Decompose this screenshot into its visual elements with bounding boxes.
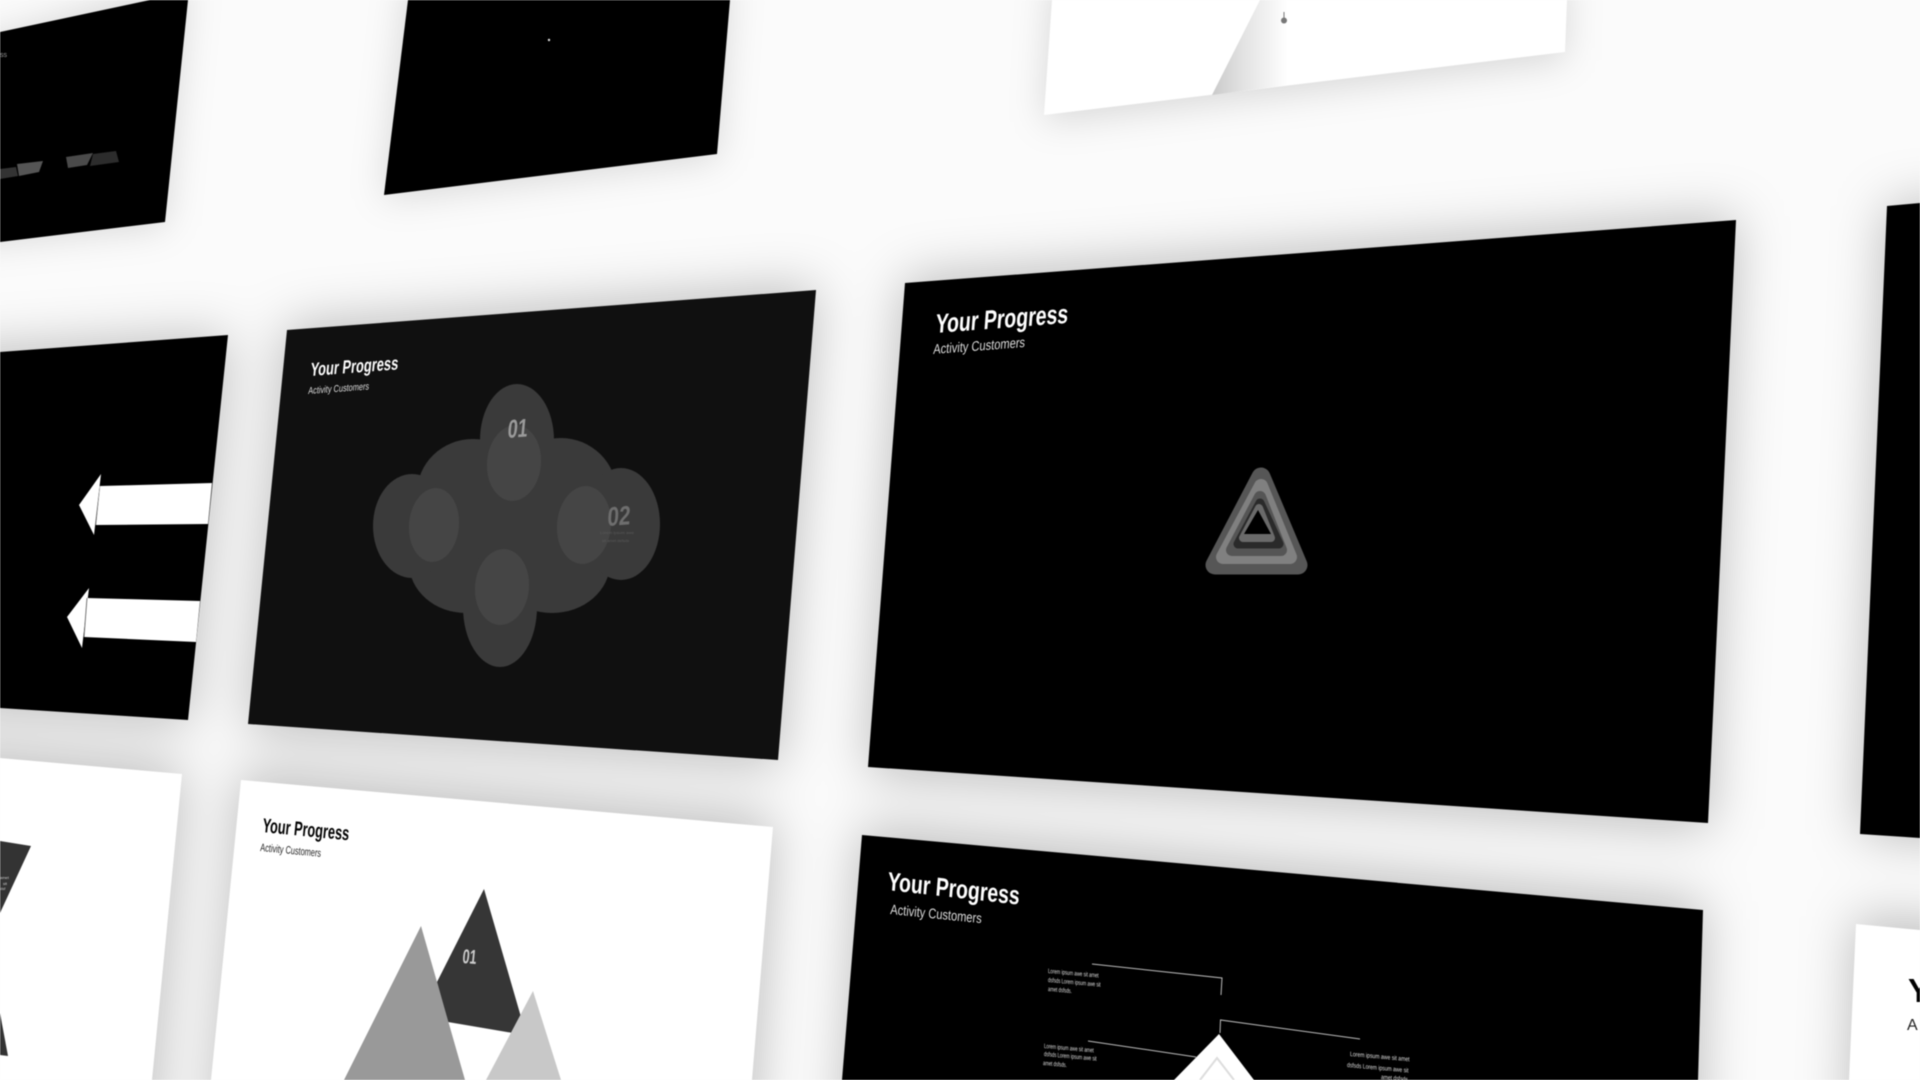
panel: top-center dark slide [384,0,730,195]
slide background [868,220,1736,823]
callout text left bottom [1043,1043,1097,1069]
slide title: Your Progress [935,299,1069,339]
clipped subtitle: A [1907,1017,1918,1034]
pin icon [1281,12,1287,24]
panel: top-right white slide [1044,0,1567,115]
slide title: Your Progress [261,815,350,845]
slide subtitle: Activity Customers [260,842,322,860]
caption 02 [600,530,635,543]
callout text left top: dsfsds Lorem ipsum awe sit [1048,977,1101,989]
top row shadows [0,0,1567,246]
slide subtitle: Activity Customers [308,381,370,397]
concentric triangle [1215,477,1298,565]
chart segments [0,151,119,179]
callout text left top: Lorem ipsum awe sit amet [1048,968,1099,980]
white dot [548,39,550,41]
slide subtitle: Activity Customers [933,334,1026,357]
tiny caption: sit [3,881,8,886]
number 02: 02 [607,500,631,532]
callout text left top: amet dsfsds. [1048,986,1072,995]
panel: dark slide with cloud diagram [248,290,816,760]
white pyramid [1174,1034,1254,1080]
dark shape lower [0,1013,8,1056]
callout text right: Lorem ipsum awe sit amet [1350,1051,1410,1063]
slide subtitle: Activity Customers [890,901,982,926]
callout text left bottom: dsfsds Lorem ipsum awe sit [1044,1051,1097,1063]
arrow 1 [79,474,212,535]
slide background [842,835,1703,1080]
callout text left top [1048,968,1101,995]
slide background [0,758,182,1080]
slide title: Your Progress [310,353,399,381]
grey peak [344,926,465,1080]
cloud shape [373,384,660,667]
dark shape upper [0,841,31,913]
callout text right [1347,1051,1410,1080]
panel: top-left dark slide [0,0,188,242]
slide background [1044,0,1567,115]
arrow 2 [67,588,200,648]
dark peak [437,889,521,1033]
slide background [1849,924,1920,1080]
tiny caption [0,875,10,891]
tiny caption: dsf [0,886,6,891]
connector lines [1088,964,1360,1057]
callout text left bottom: Lorem ipsum awe sit amet [1044,1043,1094,1055]
number 01: 01 [461,946,478,969]
slide background [0,335,228,720]
inner lobes [406,423,614,627]
panel: main dark slide with triangle [868,220,1736,823]
panel: bottom-left white slide [0,758,182,1080]
light peak [486,991,561,1080]
caption 02: sit amet dsfsds [602,538,629,543]
slide background [0,0,188,242]
pyramid inner outline [1200,1058,1234,1080]
panel: left dark slide with arrows [0,335,228,720]
slide background [248,290,816,760]
panel: right dark slide [1860,203,1920,838]
callout text right: dsfsds Lorem ipsum awe sit [1347,1062,1409,1075]
panel: white slide with mountains [211,780,773,1080]
fold shadow [1212,0,1288,95]
number 01: 01 [506,413,529,444]
slide title: Your Progress [887,866,1021,911]
panel: bottom-right white slide [1849,924,1920,1080]
slide background [384,0,730,195]
callout text left bottom: amet dsfsds. [1043,1060,1067,1069]
panel: bottom dark slide with pyramid [842,835,1703,1080]
slide background [211,780,773,1080]
clipped heading: ss [0,52,8,59]
tiny caption: amet [0,875,10,880]
caption 02: Lorem ipsum awe [600,530,635,535]
